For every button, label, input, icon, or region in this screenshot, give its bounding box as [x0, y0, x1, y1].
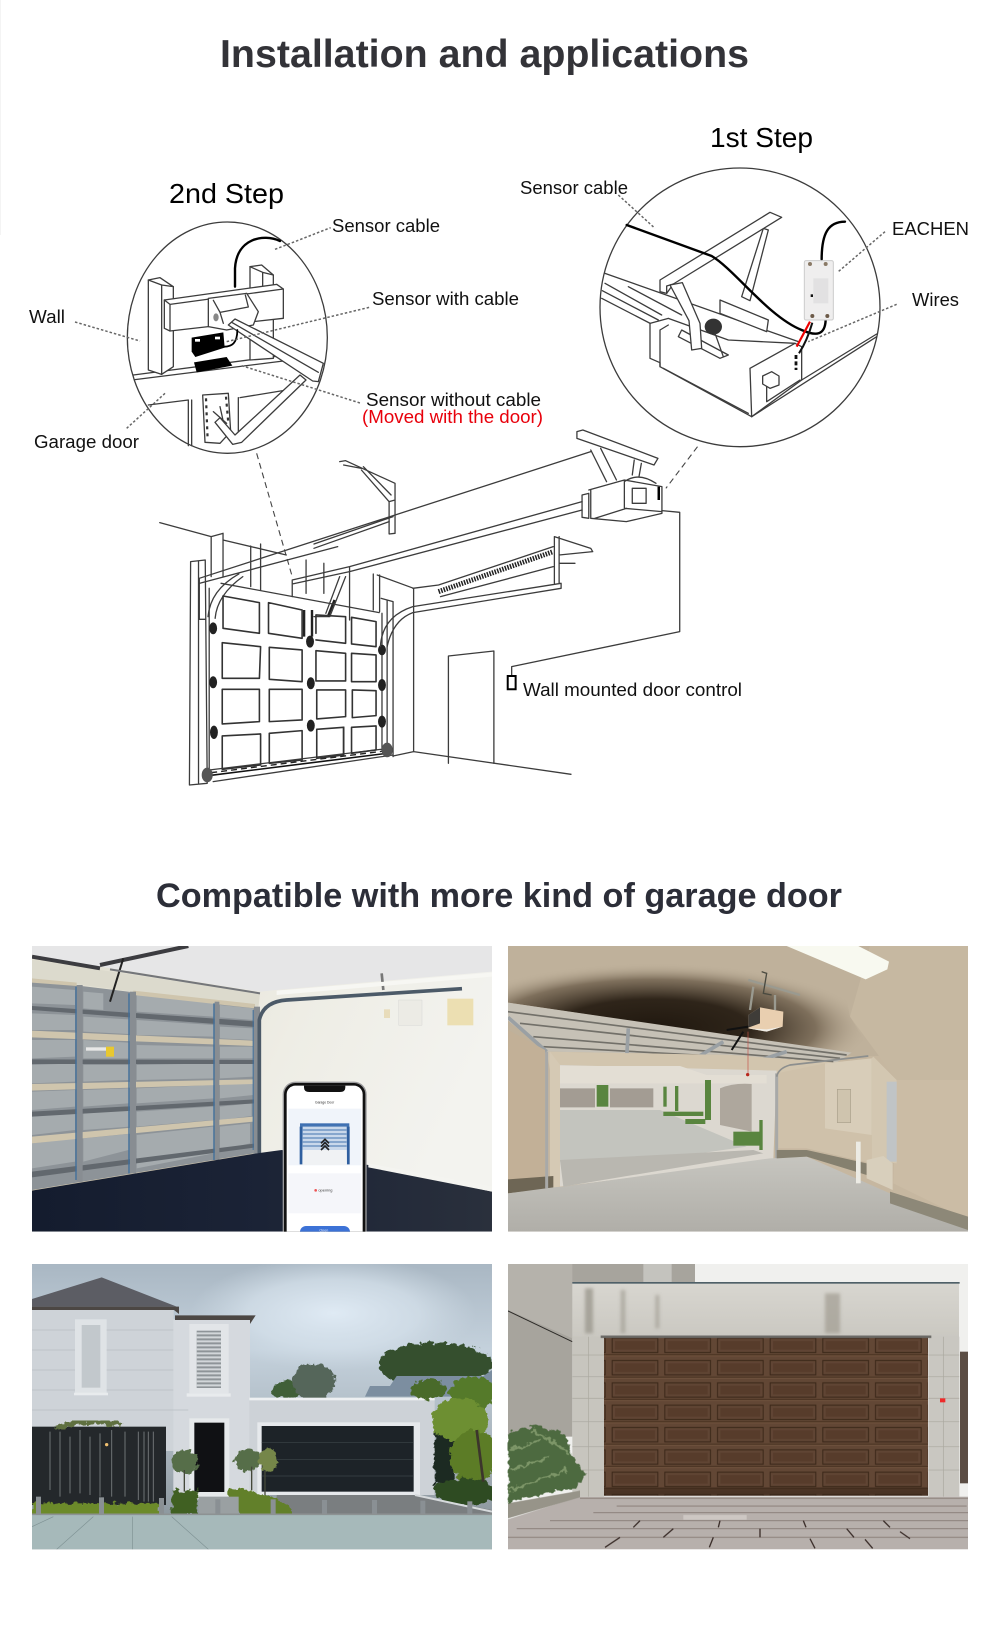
sensor cable — [627, 222, 845, 334]
ceiling bracket — [340, 461, 395, 534]
photo: garage interior with phone app — [32, 946, 492, 1248]
tracks — [547, 1052, 777, 1188]
label: sensor without cable: Sensor without cable — [366, 389, 541, 410]
floor rail and lower frame — [133, 355, 287, 446]
sensor with cable — [192, 332, 225, 357]
right wall post — [250, 265, 273, 360]
header above opening — [547, 1052, 837, 1073]
left wall post — [148, 278, 173, 374]
right track and spring — [380, 537, 593, 647]
windows — [74, 1319, 108, 1395]
bracket bar — [660, 212, 782, 293]
wall right of opening — [778, 1066, 872, 1162]
door panels — [32, 980, 257, 1191]
overhead rail — [602, 273, 877, 417]
small trees — [172, 1448, 278, 1473]
paving — [508, 1497, 968, 1549]
trees behind — [272, 1342, 492, 1400]
door rollers — [202, 622, 393, 782]
fluorescent light — [787, 946, 889, 979]
heading: compatible garage doors: Compatible with more kind of garage door — [156, 877, 842, 915]
bracket right leg — [742, 228, 768, 301]
slanted stair wall — [850, 946, 968, 1080]
photo: brown wooden garage door — [508, 1264, 968, 1549]
diagram: 2nd step magnified circle — [75, 222, 371, 453]
main house — [32, 1309, 174, 1451]
diagram: 1st step magnified circle — [600, 168, 897, 447]
phone: Garage Door — [315, 1100, 335, 1104]
shrub — [508, 1427, 585, 1502]
photo: white house with dark garage door — [32, 1257, 497, 1549]
concrete lintel — [572, 1283, 959, 1337]
bracket left leg — [670, 283, 702, 350]
panel on wall — [825, 1058, 872, 1135]
plants — [597, 1080, 763, 1150]
phone: Open — [319, 1228, 328, 1232]
EACHEN controller module — [804, 261, 833, 320]
wall and ceiling — [160, 523, 571, 774]
mounting pulley — [705, 319, 722, 335]
cream horizontal struts — [32, 978, 255, 1192]
door shadow — [604, 1487, 928, 1496]
mounting plate — [720, 300, 768, 332]
bottom rail — [211, 751, 387, 773]
label: moved with the door: (Moved with the door) — [362, 406, 543, 427]
sensor without cable — [194, 357, 232, 372]
cross beam — [164, 284, 283, 331]
neighbouring concrete wall — [508, 1264, 695, 1437]
door underside — [508, 1003, 852, 1063]
leader lines — [618, 195, 897, 342]
overhead tracks — [199, 452, 591, 619]
phone: opening — [318, 1188, 333, 1193]
pavement — [32, 1515, 492, 1549]
floor — [508, 1157, 968, 1232]
wall left of opening — [508, 1046, 545, 1179]
heater pipes — [887, 1082, 897, 1162]
label: wall mounted door control: Wall mounted door control — [523, 679, 742, 700]
door outline — [209, 583, 393, 782]
side track — [259, 989, 462, 1153]
header — [116, 974, 260, 1006]
opener socket — [763, 372, 779, 388]
photo: garage interior open door — [508, 946, 968, 1232]
phone — [283, 1082, 367, 1248]
wall control — [508, 676, 516, 689]
label: 1st step: 1st Step — [710, 122, 813, 153]
wooden door — [604, 1337, 928, 1496]
brace strut — [215, 375, 306, 444]
fence — [32, 1427, 166, 1505]
title: Installation and applications — [220, 33, 749, 76]
wall boxes — [384, 999, 473, 1025]
siding lines — [32, 1330, 188, 1410]
label: wall: Wall — [29, 306, 65, 327]
label: wires: Wires — [912, 289, 959, 310]
sensor housing — [208, 293, 258, 330]
opener mounting bracket — [577, 430, 658, 482]
overhead operator arm — [304, 600, 335, 637]
left jamb — [189, 560, 207, 785]
floor — [32, 1150, 492, 1232]
label: sensor cable left: Sensor cable — [332, 215, 440, 236]
block pillars — [572, 1337, 604, 1497]
hedges — [32, 1488, 290, 1516]
app open button — [300, 1226, 350, 1232]
leader lines — [75, 228, 371, 428]
doorway outside view — [560, 1065, 777, 1187]
hinge plate — [203, 393, 231, 443]
door arm — [228, 319, 323, 382]
opener unit — [727, 972, 800, 1076]
crown moulding — [276, 978, 436, 995]
app door picture — [288, 1109, 361, 1165]
garage — [249, 1398, 435, 1495]
opener rail — [32, 946, 188, 968]
right building — [960, 1352, 968, 1483]
gravel driveway — [277, 1495, 492, 1515]
diagram: garage door opener overview — [160, 430, 698, 785]
roof — [32, 1277, 177, 1307]
opener box — [650, 318, 802, 417]
vertical struts — [77, 985, 260, 1182]
door panels — [222, 596, 376, 769]
ceiling — [32, 946, 492, 992]
label: garage door: Garage door — [34, 431, 139, 452]
ceiling — [508, 946, 968, 1056]
label: sensor cable right: Sensor cable — [520, 177, 628, 198]
warning label — [86, 1047, 114, 1057]
trees and bushes right — [410, 1377, 497, 1506]
interior door — [448, 651, 494, 763]
label: 2nd step: 2nd Step — [169, 178, 284, 209]
opener rail — [292, 502, 582, 620]
front door — [189, 1418, 229, 1497]
opener unit — [582, 477, 662, 522]
label: EACHEN: EACHEN — [892, 218, 969, 239]
steel horizontal struts — [32, 1006, 260, 1177]
label: sensor with cable: Sensor with cable — [372, 288, 519, 309]
sensor cable — [224, 238, 280, 347]
app status — [314, 1189, 317, 1192]
bollards — [36, 1497, 472, 1515]
wires — [796, 322, 812, 370]
wire to wall control — [512, 511, 680, 677]
